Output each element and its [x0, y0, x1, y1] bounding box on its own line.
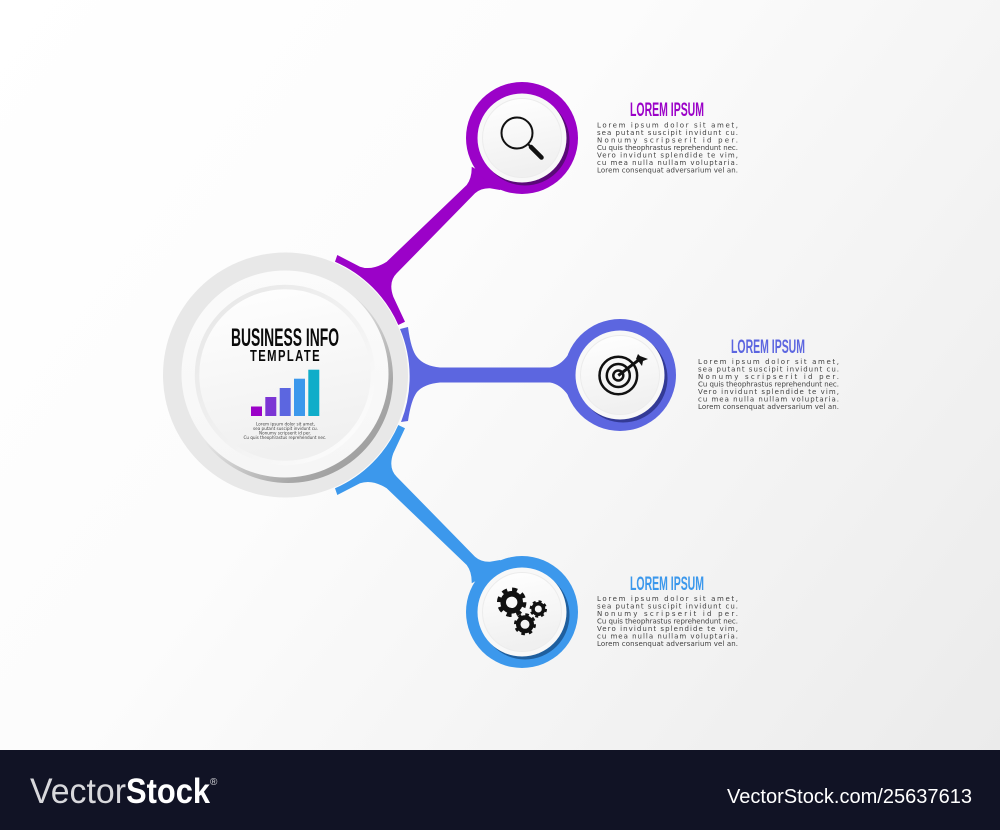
footer logo	[30, 772, 218, 811]
icon: target with arrow	[600, 354, 648, 394]
text block: blue: Nonumy scripserit id per.	[597, 610, 738, 618]
text block: violet: Lorem consenquat adversarium vel an.	[698, 403, 839, 411]
text block: blue: cu mea nulla nullam voluptaria.	[597, 632, 738, 640]
text block: blue: Lorem consenquat adversarium vel an.	[597, 640, 738, 648]
footer logo: Stock	[126, 772, 210, 811]
text block: blue: Vero invidunt splendide te vim,	[597, 625, 738, 633]
text block: blue: Lorem ipsum dolor sit amet,	[597, 595, 738, 603]
icon: magnifier	[502, 118, 542, 158]
node: violet disc	[576, 330, 668, 422]
text block: violet: Vero invidunt splendide te vim,	[698, 388, 839, 396]
hub caption: Cu quis theophrastus reprehendunt nec.	[244, 435, 326, 440]
text block: violet	[698, 336, 839, 411]
hub caption: Lorem ipsum dolor sit amet,	[256, 422, 315, 427]
text block: violet: Nonumy scripserit id per.	[698, 373, 839, 381]
text block: purple	[597, 99, 738, 174]
text block: purple: Lorem consenquat adversarium vel an.	[597, 166, 738, 174]
connector: purple	[335, 82, 578, 325]
hub outer ring	[163, 252, 408, 498]
text block: purple: Lorem ipsum dolor sit amet,	[597, 122, 738, 130]
panel: central hub	[163, 252, 408, 498]
footer bar	[0, 750, 1000, 830]
text block: purple: Nonumy scripserit id per.	[597, 136, 738, 144]
hub caption: sea putant suscipit invidunt cu.	[253, 426, 318, 431]
text block: violet: cu mea nulla nullam voluptaria.	[698, 396, 839, 404]
footer logo: ®	[210, 777, 218, 788]
text block: blue: sea putant suscipit invidunt cu.	[597, 602, 738, 610]
node: blue disc	[478, 568, 570, 660]
text block: violet: Lorem ipsum dolor sit amet,	[698, 358, 839, 366]
text block: violet: sea putant suscipit invidunt cu.	[698, 366, 839, 374]
footer image id: VectorStock.com/25637613	[727, 786, 972, 808]
hub caption: Nonumy scripserit id per.	[259, 431, 311, 436]
text block: purple: sea putant suscipit invidunt cu.	[597, 129, 738, 137]
text block: purple: cu mea nulla nullam voluptaria.	[597, 159, 738, 167]
icon: gears	[499, 590, 546, 634]
heading: violet: LOREM IPSUM	[731, 336, 805, 358]
connector: violet	[400, 319, 676, 431]
text block: blue	[597, 573, 738, 648]
text block: blue: Cu quis theophrastus reprehendunt nec.	[597, 618, 738, 626]
hub drop shadow	[183, 273, 393, 483]
node: purple disc	[478, 94, 570, 186]
text block: violet: Cu quis theophrastus reprehendunt nec.	[698, 380, 839, 388]
connector: blue	[335, 425, 578, 668]
footer logo: Vector	[30, 772, 126, 811]
title: business info: BUSINESS INFO	[231, 324, 339, 352]
bar chart	[251, 370, 319, 416]
text block: purple: Cu quis theophrastus reprehendunt nec.	[597, 144, 738, 152]
heading: blue: LOREM IPSUM	[630, 573, 704, 595]
hub inner ring	[197, 287, 373, 463]
hub disc	[182, 270, 388, 478]
text block: purple: Vero invidunt splendide te vim,	[597, 152, 738, 160]
subtitle: template: TEMPLATE	[250, 348, 321, 365]
hub caption	[244, 422, 326, 440]
heading: purple: LOREM IPSUM	[630, 99, 704, 121]
